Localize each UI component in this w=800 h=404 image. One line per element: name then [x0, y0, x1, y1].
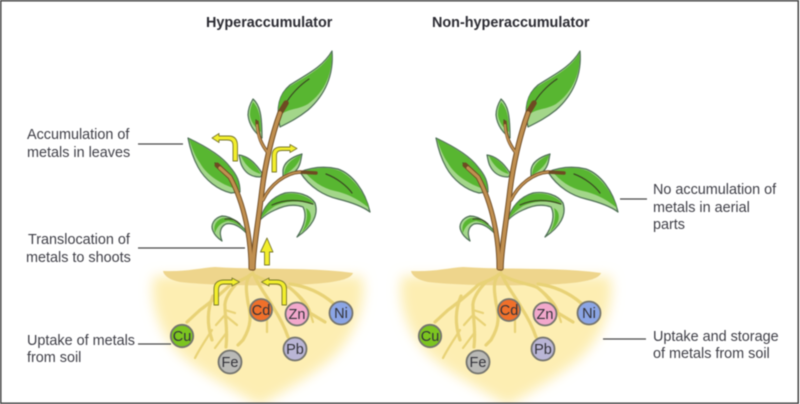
leaf: left large: [188, 138, 240, 193]
leaf: middle left small: [239, 155, 262, 177]
metal: Cd: Cd: [500, 303, 518, 319]
callout: uptake and storage of metals from soil: Uptake and storage: [653, 329, 779, 345]
leaf: curved lower right: [260, 192, 316, 237]
callout: accumulation of metals in leaves: metals in leaves: [27, 145, 130, 161]
callout: no accumulation in aerial parts: metals in aerial: [653, 200, 750, 216]
metal: Ni: Ni: [582, 306, 596, 322]
metal: Fe: [218, 350, 242, 374]
leaf: top: [278, 51, 332, 127]
metal: Zn: [286, 302, 308, 326]
metal: Cd: [498, 299, 520, 321]
metal: Pb: Pb: [534, 342, 552, 358]
callout: translocation of metals to shoots: Translocation of: [28, 232, 131, 248]
callout: translocation of metals to shoots: metals to shoots: [26, 250, 131, 266]
metal: Fe: Fe: [222, 355, 238, 371]
metal: Cu: [171, 325, 193, 347]
callout: uptake of metals from soil: from soil: [27, 350, 81, 366]
metal: Pb: [532, 338, 554, 360]
callout: uptake and storage of metals from soil: [603, 329, 779, 362]
metal: Zn: Zn: [537, 307, 553, 323]
metal: Ni: Ni: [334, 306, 348, 322]
leaf: curved lower left: [212, 216, 250, 241]
leaf: curved lower left: [460, 216, 498, 241]
metal: Pb: [284, 338, 306, 360]
soil zone: [400, 267, 612, 404]
leaf: upper small: [248, 99, 262, 138]
leaf: upper small: [496, 99, 510, 138]
roots: [187, 273, 333, 358]
panel: hyperaccumulator plant: [152, 51, 370, 404]
leaf: left large: [436, 138, 488, 193]
callout: translocation of metals to shoots: [26, 232, 245, 266]
roots: [435, 273, 581, 358]
metal: Zn: Zn: [289, 307, 305, 323]
leaf: middle left small: [487, 155, 510, 177]
callout: accumulation of metals in leaves: [27, 127, 183, 161]
callout: uptake of metals from soil: Uptake of metals: [27, 333, 135, 349]
metal: Cd: [250, 299, 272, 321]
metal: Cd: Cd: [252, 303, 270, 319]
leaf: middle right small: [283, 154, 302, 177]
arrow: shoot left: [212, 134, 238, 161]
metal: Pb: Pb: [286, 342, 304, 358]
metal: Fe: Fe: [470, 355, 486, 371]
metal: Zn: [534, 302, 556, 326]
leaf: curved lower right: [508, 192, 564, 237]
leaf: top: [526, 51, 580, 127]
heading: Non-hyperaccumulator: Non-hyperaccumulator: [432, 15, 590, 31]
metal: Fe: [466, 350, 490, 374]
leaf: middle right small: [531, 154, 550, 177]
callout: no accumulation in aerial parts: parts: [653, 217, 685, 233]
leaf: right large: [300, 167, 370, 212]
callout: no accumulation in aerial parts: [620, 182, 777, 233]
callout: no accumulation in aerial parts: No accumulation of: [653, 182, 777, 198]
metal: Ni: [578, 302, 600, 324]
arrow: root uptake right: [262, 278, 286, 305]
metal: Cu: Cu: [421, 329, 439, 345]
soil zone: [152, 267, 364, 404]
stems: [465, 103, 564, 268]
panel: non-hyperaccumulator plant: [400, 51, 618, 404]
heading: Hyperaccumulator: Hyperaccumulator: [206, 15, 333, 31]
leaf: right large: [548, 167, 618, 212]
callout: uptake and storage of metals from soil: of metals from soil: [653, 346, 770, 362]
arrow: translocation up: [260, 238, 273, 265]
arrow: shoot right: [272, 144, 297, 172]
callout: accumulation of metals in leaves: Accumulation of: [27, 127, 130, 143]
metal: Cu: [419, 325, 441, 347]
arrow: root uptake left: [214, 278, 240, 305]
callout: uptake of metals from soil: [27, 333, 171, 366]
metal: Ni: [330, 302, 352, 324]
stems: [217, 103, 316, 268]
metal: Cu: Cu: [173, 329, 191, 345]
